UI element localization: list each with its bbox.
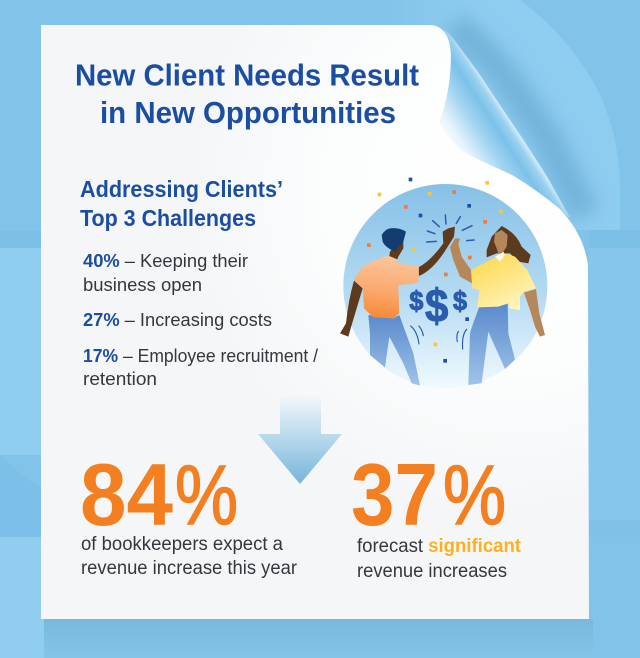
challenge list xyxy=(83,251,318,389)
challenge 1: business open xyxy=(83,275,202,295)
lighter shape behind curl xyxy=(380,0,620,230)
stat: 37% xyxy=(351,445,522,582)
person: man xyxy=(340,227,455,386)
curl shadow xyxy=(455,25,585,215)
man hair xyxy=(382,228,406,252)
challenge 3 xyxy=(83,346,318,389)
title: New Client Needs Result xyxy=(75,58,419,92)
clap lines xyxy=(427,215,474,242)
shadow below page xyxy=(44,619,593,658)
dollar signs: $ xyxy=(425,280,448,332)
woman shirt xyxy=(471,253,536,310)
challenge 3: retention xyxy=(83,369,157,389)
challenge 1 xyxy=(83,251,248,295)
folded corner flap xyxy=(436,25,570,218)
stat caption xyxy=(81,534,298,579)
stat: 84% xyxy=(80,445,298,579)
heading: top 3 challenges xyxy=(80,176,283,231)
woman hair xyxy=(487,226,531,263)
dollar signs xyxy=(409,280,467,332)
man jeans xyxy=(368,315,420,386)
illustration: high five in circle xyxy=(340,178,547,388)
man left arm xyxy=(340,281,363,337)
challenge 3: 17% – Employee recruitment / xyxy=(83,346,318,366)
stat: 84%: % xyxy=(175,448,238,542)
dollar signs: $ xyxy=(453,286,467,316)
circle backdrop xyxy=(343,184,547,388)
confetti xyxy=(367,178,503,363)
woman raised arm xyxy=(450,238,472,283)
motion lines xyxy=(411,326,467,349)
man neck xyxy=(389,237,403,259)
panel: white page with curled corner xyxy=(41,25,589,619)
stat: 37%: 37 xyxy=(351,445,438,544)
stat caption: forecast significant xyxy=(357,536,522,557)
challenge 2: 27% – Increasing costs xyxy=(83,310,272,330)
heading: top 3 challenges: Top 3 Challenges xyxy=(80,205,256,231)
person: woman xyxy=(450,226,545,385)
challenge 1: 40% – Keeping their xyxy=(83,251,248,271)
man raised arm xyxy=(418,227,455,276)
woman face xyxy=(494,230,508,253)
dollar signs: $ xyxy=(409,286,423,316)
stat caption: revenue increase this year xyxy=(81,558,298,579)
woman collar xyxy=(495,252,505,262)
heading: top 3 challenges: Addressing Clients’ xyxy=(80,176,283,202)
arrow down xyxy=(258,395,342,484)
stat caption: of bookkeepers expect a xyxy=(81,534,283,555)
title xyxy=(75,58,419,130)
stat: 37%: % xyxy=(443,448,506,542)
stat caption xyxy=(357,536,522,582)
man shirt xyxy=(354,256,419,318)
woman jeans xyxy=(468,303,515,385)
stat caption: revenue increases xyxy=(357,561,507,582)
woman right arm xyxy=(524,289,545,337)
stat: 84%: 84 xyxy=(80,445,173,544)
title: in New Opportunities xyxy=(100,96,396,130)
